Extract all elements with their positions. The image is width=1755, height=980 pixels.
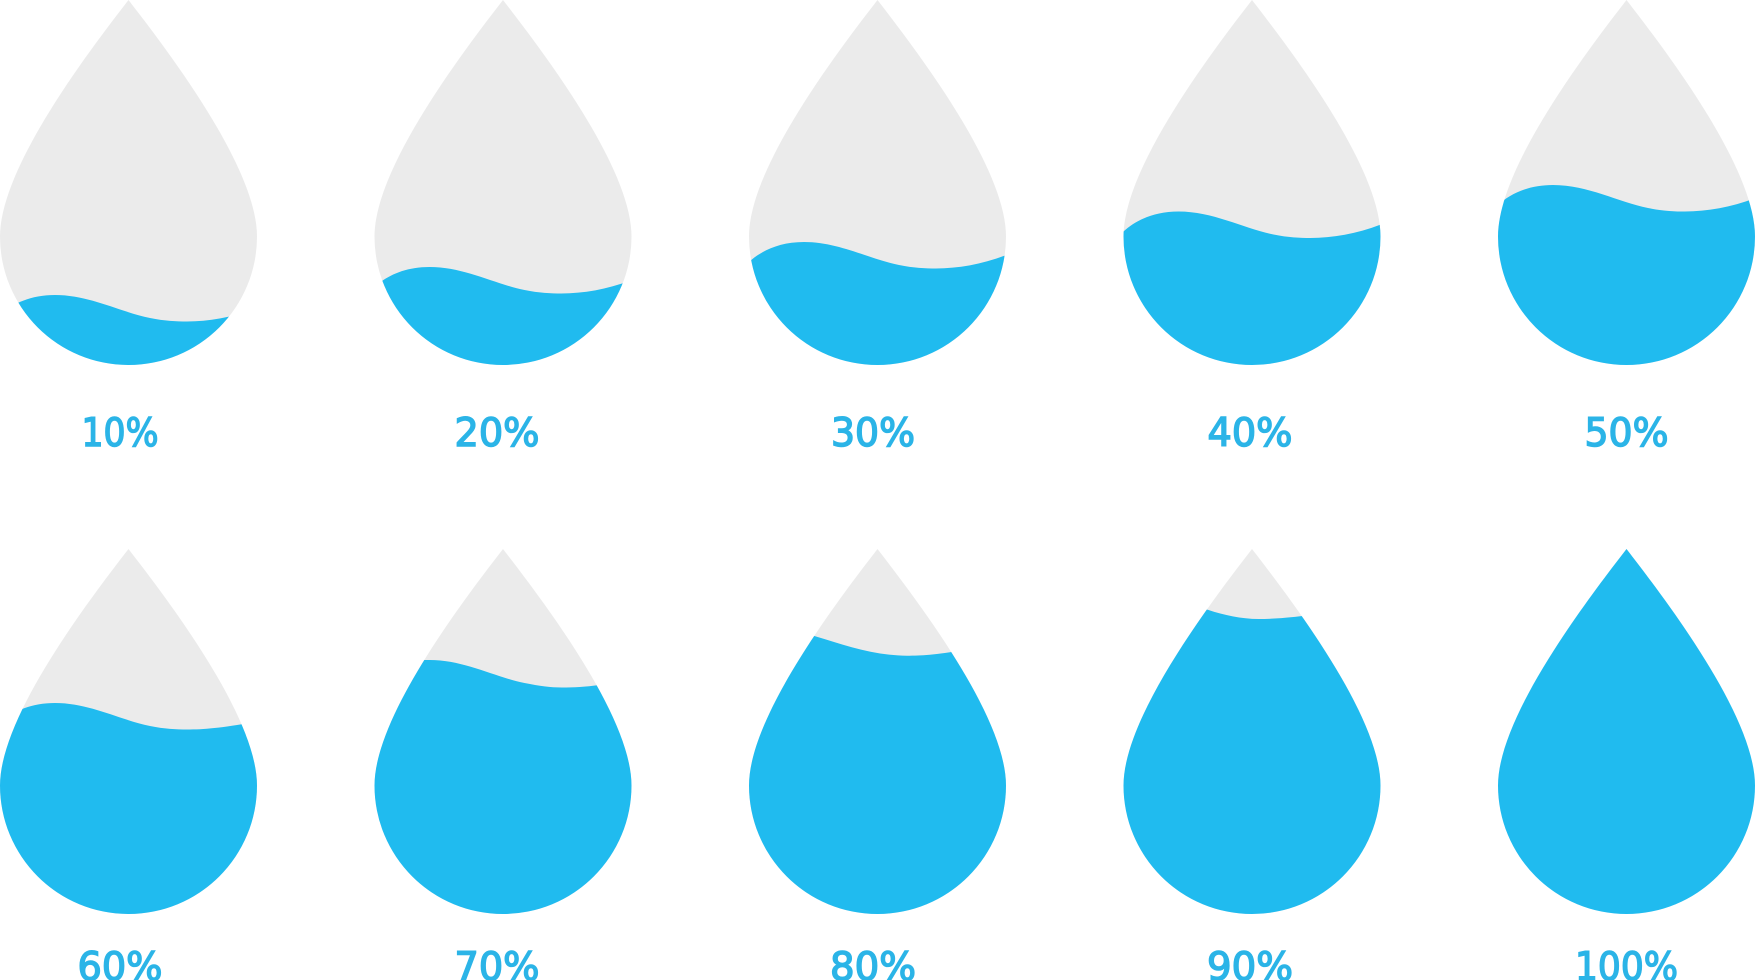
panel: 20% drop	[374, 0, 632, 448]
panel: 10% drop	[0, 0, 257, 448]
icon: drop filled 50%	[1498, 0, 1755, 365]
label: 40%: 40%	[1208, 410, 1292, 456]
panel: 50% drop	[1498, 0, 1755, 448]
icon: drop filled 10%	[0, 0, 257, 365]
panel: 40% drop	[1124, 0, 1380, 448]
label: 30%: 30%	[831, 410, 915, 456]
icon: drop filled 60%	[0, 550, 257, 914]
panel: 30% drop	[749, 0, 1006, 448]
label: 20%: 20%	[454, 410, 540, 456]
icon: drop filled 70%	[374, 550, 632, 914]
panel: 80% drop	[749, 549, 1019, 980]
label: 10%: 10%	[82, 410, 158, 456]
icon: drop filled 20%	[374, 0, 632, 365]
panel: 60% drop	[0, 549, 260, 980]
panel: 90% drop	[1124, 549, 1394, 980]
icon: drop filled 40%	[1124, 0, 1380, 365]
label: 50%: 50%	[1584, 410, 1668, 456]
icon: drop filled 90%	[1124, 550, 1380, 914]
panel: 100% drop	[1498, 549, 1755, 980]
icon: drop filled 80%	[749, 550, 1006, 914]
icon: drop filled 100%	[1498, 549, 1755, 914]
icon: drop filled 30%	[749, 0, 1006, 365]
panel: 70% drop	[354, 549, 634, 980]
